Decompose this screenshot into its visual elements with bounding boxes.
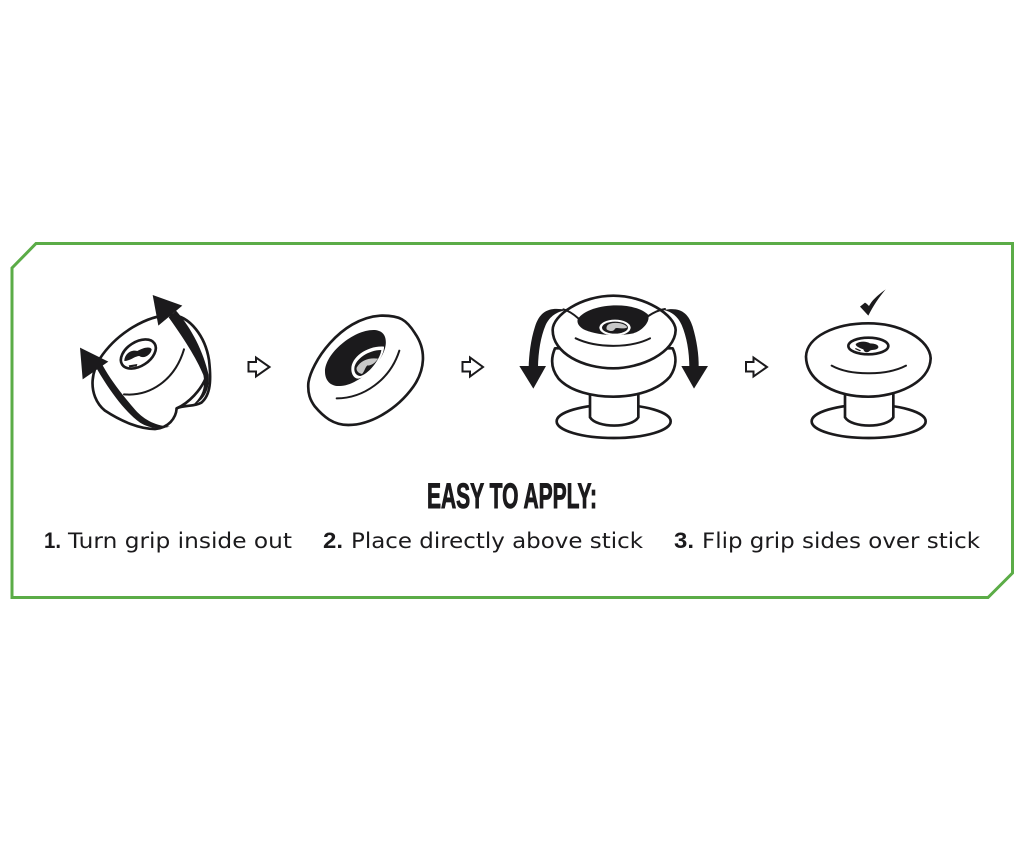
grip hole (116, 333, 161, 375)
grip hole (848, 338, 888, 354)
arrow: left fold (519, 309, 566, 389)
icon: grip placed on stick with sides flipping (519, 296, 708, 438)
arrow: step three to four (746, 358, 767, 376)
crease (337, 351, 399, 398)
icon: grip being turned inside out (80, 295, 210, 429)
heading: EASY TO APPLY: (427, 477, 597, 516)
panel: green chamfered frame (12, 244, 1012, 598)
arrow: right turn (153, 295, 209, 406)
step 2 text: Place directly above stick (351, 529, 644, 553)
step 3 text: 3. (674, 528, 694, 553)
step 1 text: Turn grip inside out (67, 529, 292, 553)
icon: inverted grip (308, 316, 423, 425)
crease (576, 338, 650, 346)
lower grip fold (552, 348, 675, 397)
inner ring (599, 320, 631, 336)
inner ring (351, 347, 384, 379)
step 2 text: 2. (323, 528, 343, 553)
icon: finished grip on stick (806, 289, 931, 438)
stick stem (845, 392, 893, 426)
stick base (812, 405, 926, 438)
black cavity (577, 305, 649, 335)
step 1 text: 1. (44, 528, 61, 553)
black inner cavity (325, 330, 386, 386)
grip body (806, 323, 931, 397)
grip crease (124, 349, 184, 395)
upper grip fold (553, 296, 676, 368)
arrow: left turn (80, 348, 170, 428)
step 3 text: Flip grip sides over stick (702, 529, 981, 553)
arrow: right fold (664, 309, 708, 389)
arrow: step two to three (462, 358, 483, 376)
arrow: step one to two (248, 358, 270, 376)
stick stem (590, 392, 638, 426)
icon: check mark (860, 289, 886, 316)
stick base (557, 405, 671, 438)
crease (832, 366, 906, 373)
